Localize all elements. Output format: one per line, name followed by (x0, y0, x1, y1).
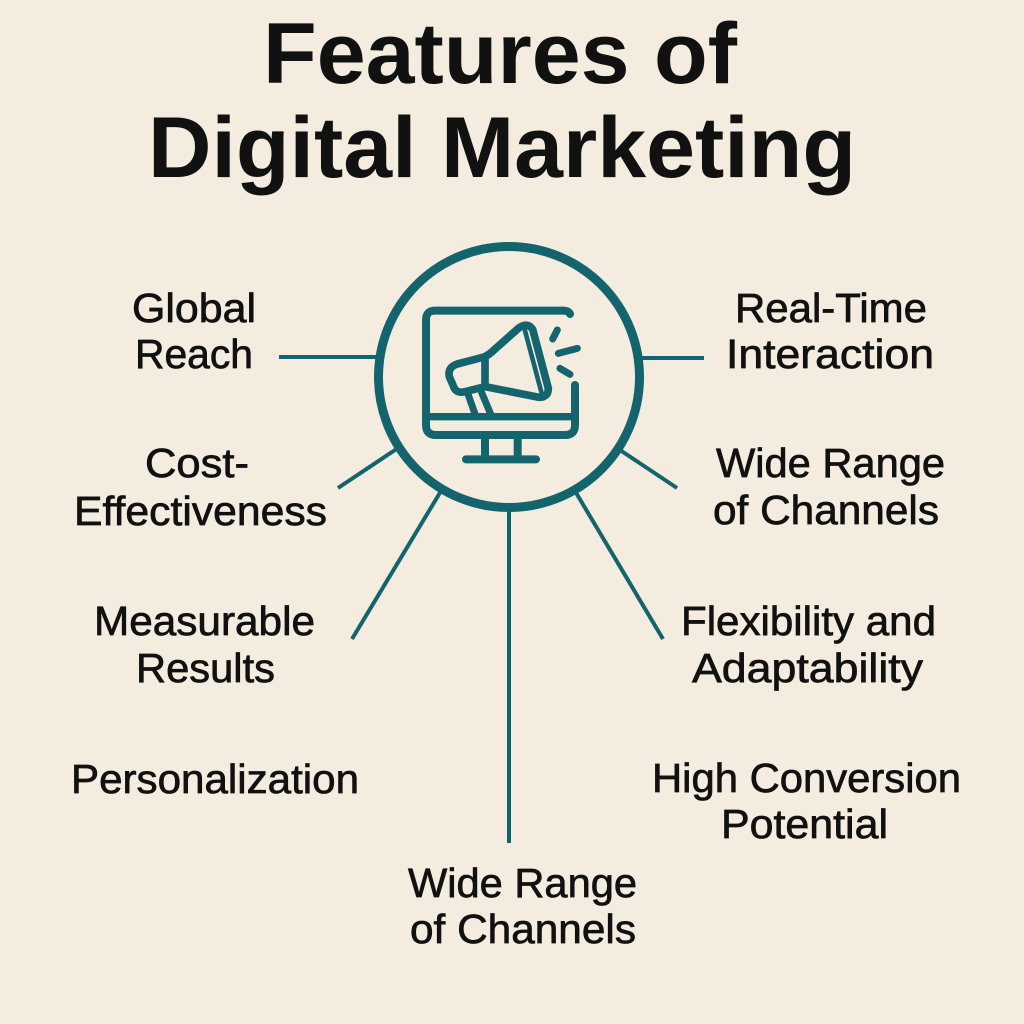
label: flexibility and adaptability: Flexibility and (681, 598, 936, 644)
label: real-time interaction: Interaction (726, 331, 934, 377)
central icon: megaphone on monitor in ring (378, 246, 640, 508)
connector: cost-effectiveness (338, 448, 398, 488)
label: real-time interaction (726, 285, 934, 377)
connector: global reach (279, 355, 378, 359)
connector: wide range of channels bottom (507, 510, 511, 843)
label: wide range of channels bottom (408, 860, 637, 952)
label: global reach: Reach (135, 331, 253, 377)
label: wide range of channels right (713, 440, 945, 533)
connector: wide range of channels right (620, 450, 677, 488)
label: real-time interaction: Real-Time (735, 285, 927, 331)
label: high conversion potential: Potential (721, 801, 888, 847)
label: wide range of channels right: of Channels (713, 487, 939, 533)
label: cost-effectiveness: Effectiveness (74, 488, 327, 534)
label: measurable results: Results (136, 645, 275, 691)
label: cost-effectiveness (74, 440, 327, 534)
label: global reach: Global (132, 285, 256, 331)
label: high conversion potential: High Conversion (652, 755, 961, 801)
label: high conversion potential (652, 755, 961, 847)
label: measurable results (94, 598, 315, 691)
label: wide range of channels bottom: Wide Range (408, 860, 637, 906)
ring (378, 246, 640, 508)
label: measurable results: Measurable (94, 598, 315, 644)
label: wide range of channels right: Wide Range (716, 440, 945, 486)
connector: flexibility and adaptability (575, 491, 663, 639)
label: wide range of channels bottom: of Channels (410, 906, 636, 952)
title (148, 6, 856, 196)
title: Digital Marketing (148, 100, 856, 196)
icon: monitor and megaphone (426, 311, 577, 459)
connector: real-time interaction (640, 356, 704, 360)
connector: measurable results (352, 491, 441, 639)
label: flexibility and adaptability (681, 598, 936, 691)
label: cost-effectiveness: Cost- (145, 440, 249, 486)
label: personalization: Personalization (71, 756, 359, 802)
title: Features of (263, 6, 737, 102)
label: global reach (132, 285, 256, 377)
label: flexibility and adaptability: Adaptability (692, 645, 924, 691)
